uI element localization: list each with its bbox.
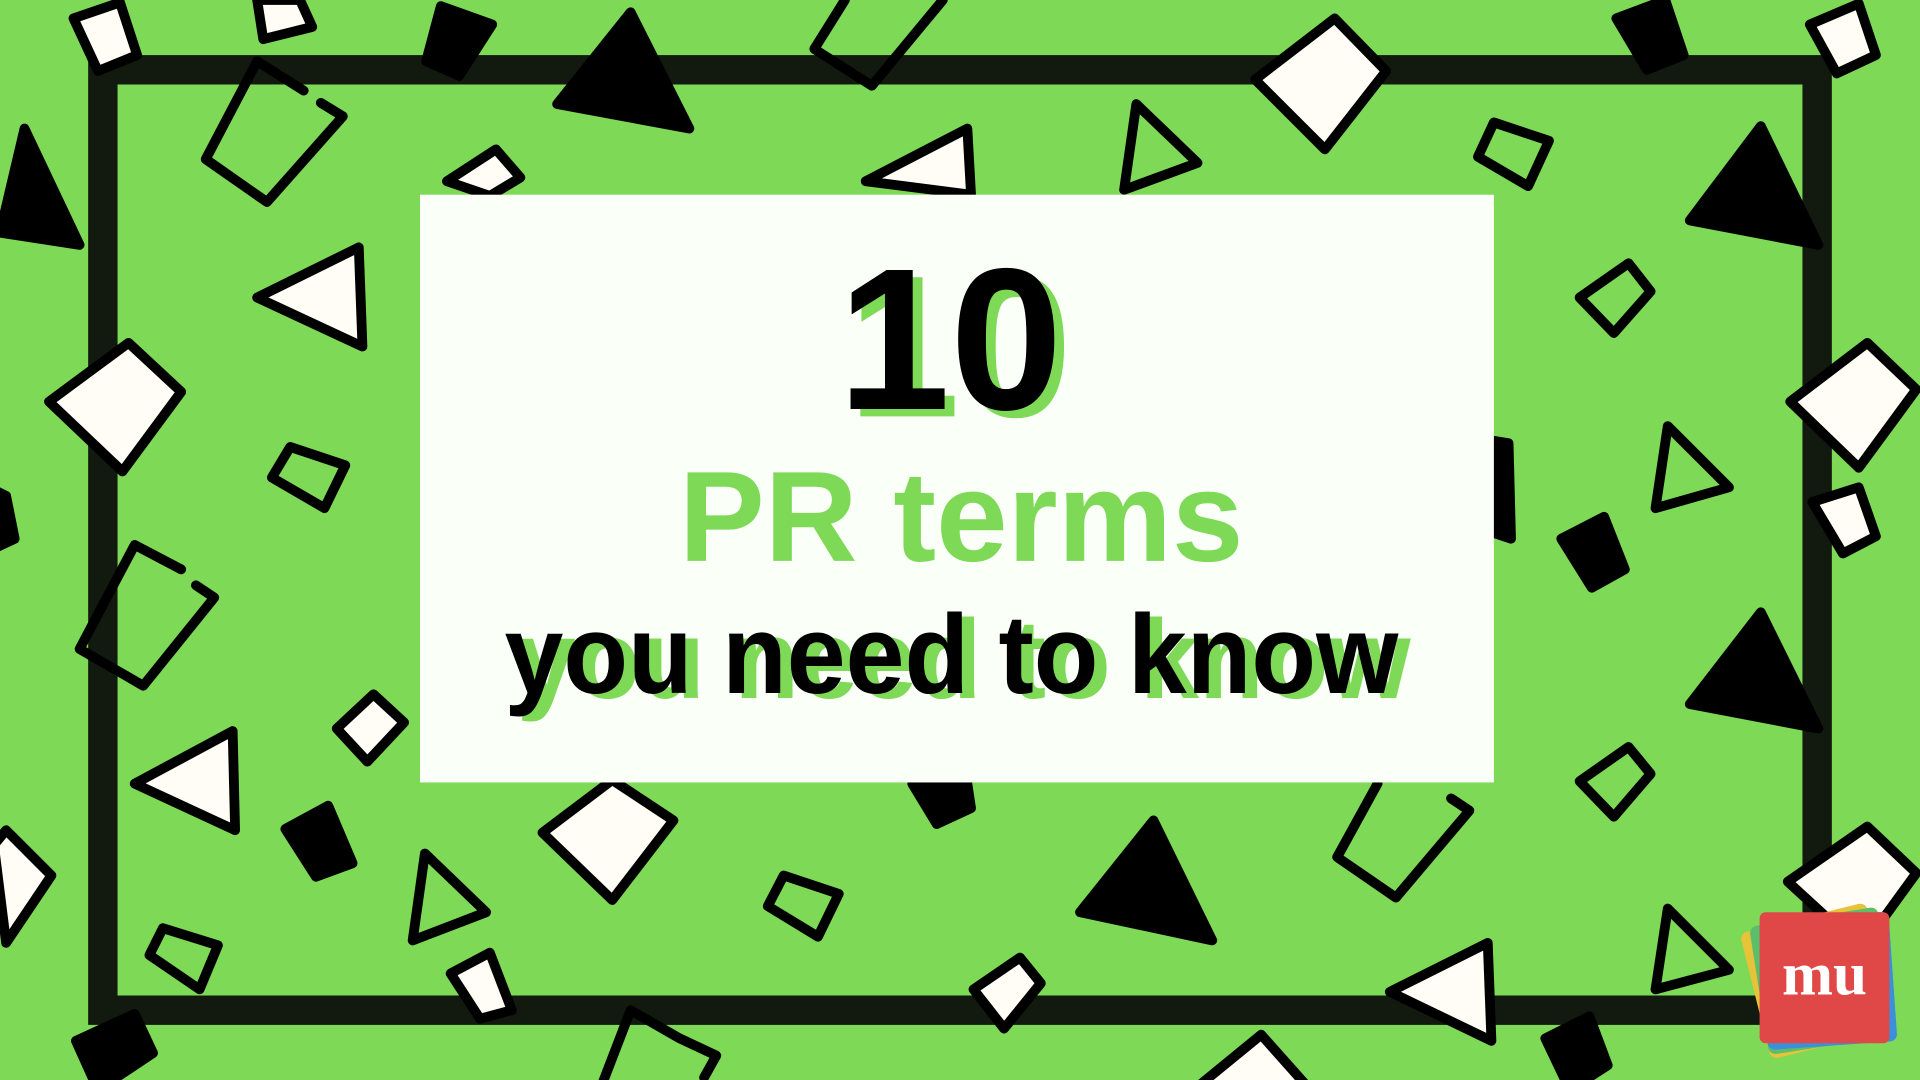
dark frame bbox=[103, 70, 1817, 1010]
title: 10: 10 bbox=[848, 233, 1072, 459]
title: you need to know: you need to know bbox=[517, 596, 1411, 722]
white title panel bbox=[420, 195, 1494, 782]
logo: mu: mu bbox=[1782, 940, 1867, 1008]
title: PR terms: PR terms bbox=[679, 446, 1243, 589]
title: you need to know: you need to know bbox=[504, 591, 1399, 717]
title: 10: 10 bbox=[838, 226, 1063, 452]
logo: mu bbox=[1740, 902, 1898, 1059]
